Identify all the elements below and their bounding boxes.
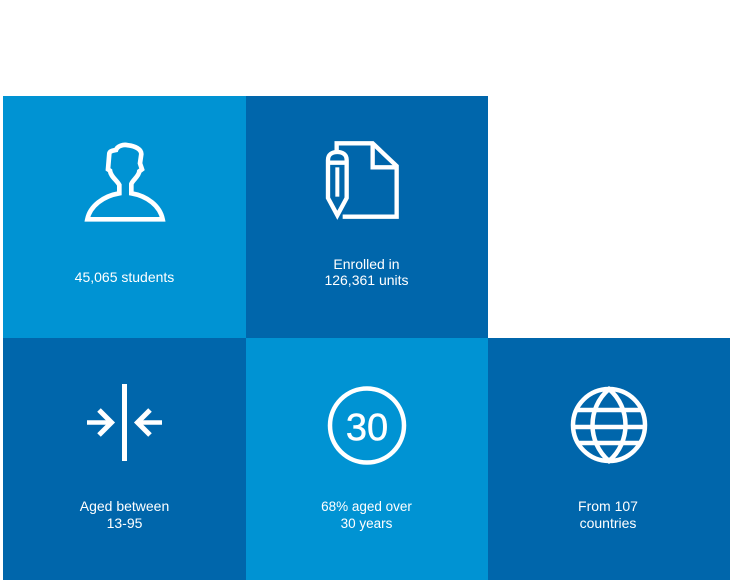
label: enrolled: Enrolled in [333, 256, 400, 272]
label: from 107 countries: countries [580, 515, 636, 531]
icon: 30 in circle [328, 386, 406, 465]
icon: globe [570, 386, 648, 464]
panel: enrolled units [246, 96, 488, 338]
label: aged between: 13-95 [107, 515, 142, 531]
icon: person [84, 142, 166, 222]
panel: countries [488, 338, 730, 580]
label: 68% aged over [321, 499, 412, 531]
icon: pencil and document [326, 141, 399, 220]
label: enrolled [324, 256, 409, 288]
label: 45,065 students: 45,065 students [75, 269, 174, 285]
label: aged between [80, 498, 169, 531]
label: 68% aged over: 68% aged over [321, 499, 412, 514]
panel: students [3, 96, 246, 338]
label: enrolled: 126,361 units [324, 272, 409, 288]
label: from 107 countries [578, 498, 638, 531]
panel: aged over 30 [246, 338, 488, 580]
panel: age range [3, 338, 246, 580]
icon: 30 in circle: 30 [346, 407, 388, 449]
label: aged between: Aged between [80, 498, 169, 514]
label: 68% aged over: 30 years [341, 516, 392, 531]
icon: arrows towards line [87, 384, 162, 461]
label: from 107 countries: From 107 [578, 498, 638, 514]
